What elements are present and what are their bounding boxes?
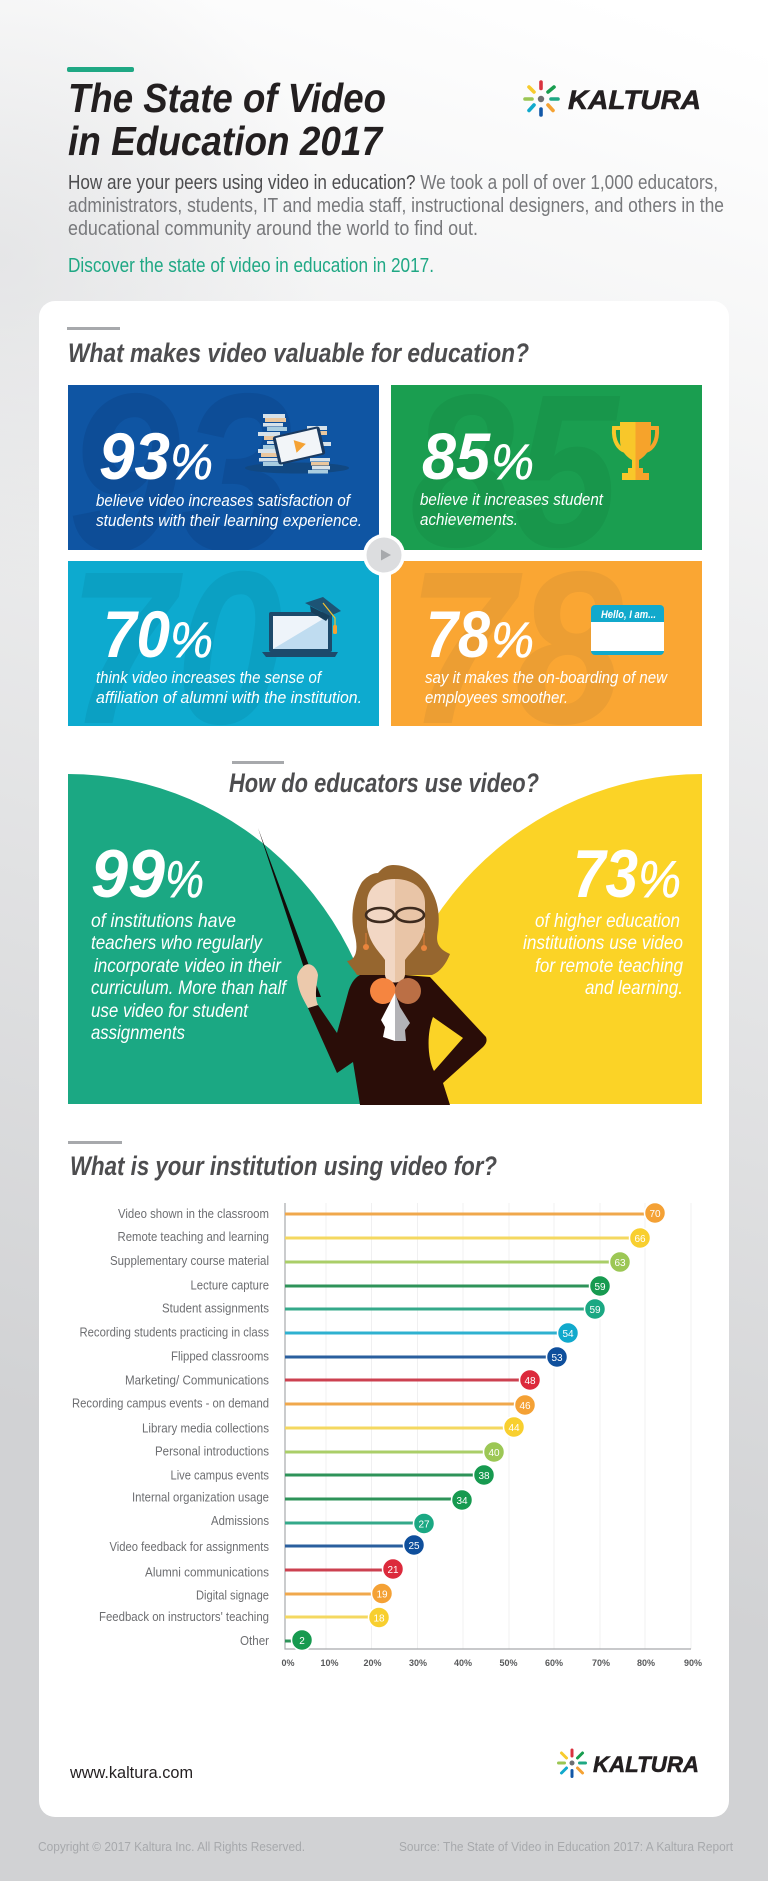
stat: 73% — [523, 836, 683, 999]
section: what makes video valuable — [67, 327, 702, 770]
green arc panel — [68, 774, 386, 1104]
stat: 73%: for remote teaching — [535, 956, 683, 977]
tablet — [272, 426, 326, 465]
row: Personal introductions — [155, 1442, 504, 1462]
row: Internal organization usage — [132, 1490, 472, 1510]
x axis labels — [281, 1658, 702, 1668]
hair — [347, 865, 450, 975]
row: Feedback on instructors' teaching — [99, 1607, 390, 1628]
row: Student assignments — [162, 1298, 606, 1320]
row: Lecture capture — [190, 1276, 610, 1296]
stat: 99% — [91, 836, 288, 1044]
row: Lecture capture: 59 — [594, 1282, 606, 1293]
panel: 93%: 93 — [68, 346, 293, 598]
description: believe video increases satisfaction of — [96, 491, 352, 510]
row: Internal organization usage: 34 — [456, 1496, 468, 1507]
bar chart — [72, 1202, 702, 1668]
intro paragraph — [68, 172, 724, 240]
row: Video shown in the classroom — [118, 1202, 666, 1224]
heading bar — [67, 327, 120, 330]
heading: How do educators use video? — [229, 768, 539, 798]
row: Other: 2 — [299, 1636, 305, 1647]
row: Library media collections: Library media collections — [142, 1420, 269, 1436]
icon: centre play button — [363, 534, 405, 576]
panel: 70%: 70 — [68, 527, 283, 770]
row: Feedback on instructors' teaching: Feedback on instructors' teaching — [99, 1609, 269, 1624]
stat: 73%: and learning. — [585, 978, 683, 999]
row: Alumni communications — [145, 1558, 404, 1580]
x axis labels: 20% — [363, 1658, 382, 1668]
stat number: 70 — [103, 597, 170, 671]
row: Flipped classrooms — [171, 1346, 568, 1368]
panel: 78%: 78 — [407, 527, 623, 770]
description: affiliation of alumni with the institution. — [96, 688, 362, 707]
description — [96, 668, 362, 707]
icon: name tag — [591, 605, 664, 655]
row: Library media collections: 44 — [508, 1423, 520, 1434]
row: Internal organization usage: Internal organization usage — [132, 1490, 269, 1504]
stat number: % — [170, 612, 213, 668]
icon: books and tablet — [245, 414, 349, 474]
pointer — [258, 828, 321, 997]
row: Supplementary course material — [110, 1252, 630, 1272]
footer logo: KALTURA — [593, 1752, 699, 1777]
row: Remote teaching and learning — [118, 1228, 650, 1248]
row: Recording students practicing in class: Recording students practicing in class — [80, 1324, 269, 1340]
row: Marketing/ Communications: 48 — [524, 1376, 536, 1387]
row: Video feedback for assignments: 25 — [408, 1541, 420, 1552]
stat: 99%: assignments — [91, 1023, 185, 1044]
row: Personal introductions: Personal introductions — [155, 1444, 269, 1458]
row: Other: Other — [240, 1633, 270, 1648]
x axis labels: 10% — [320, 1658, 339, 1668]
panel: 85%: 85 — [410, 350, 620, 593]
earrings — [363, 933, 427, 951]
intro paragraph: How are your peers using video in education? We took a poll of over 1,000 educators, — [68, 172, 718, 194]
stat number: 93 — [99, 419, 170, 493]
stat number — [99, 419, 213, 493]
stat: 73%: of higher education — [535, 911, 680, 932]
title: in Education 2017 — [68, 118, 384, 164]
heading: What makes video valuable for education? — [68, 338, 529, 368]
x axis labels: 0% — [281, 1658, 295, 1668]
row: Library media collections — [142, 1416, 524, 1438]
description — [425, 668, 669, 707]
row: Video feedback for assignments — [110, 1534, 424, 1556]
stat number: % — [491, 434, 534, 490]
row: Flipped classrooms: Flipped classrooms — [171, 1348, 269, 1364]
row: Video shown in the classroom: 70 — [649, 1209, 661, 1220]
row: Marketing/ Communications: Marketing/ Communications — [125, 1372, 269, 1388]
row: Supplementary course material: 63 — [614, 1258, 626, 1269]
x axis labels: 40% — [454, 1658, 472, 1668]
stat number: 78 — [426, 597, 490, 671]
stat number — [422, 419, 534, 493]
row: Admissions — [211, 1513, 434, 1534]
x axis labels: 80% — [637, 1658, 655, 1668]
row: Feedback on instructors' teaching: 18 — [373, 1614, 385, 1624]
stat: 99%: curriculum. More than half — [91, 978, 288, 999]
discover line: Discover the state of video in education in 2017. — [68, 255, 434, 277]
white content card — [39, 301, 729, 1817]
row: Lecture capture: Lecture capture — [190, 1278, 269, 1292]
row: Video shown in the classroom: Video shown in the classroom — [118, 1206, 269, 1221]
icon: laptop with graduation cap — [262, 597, 341, 657]
row: Marketing/ Communications — [125, 1370, 540, 1390]
collar — [370, 978, 421, 1041]
footer logo — [558, 1750, 699, 1777]
panel: 93% — [68, 385, 379, 550]
row: Remote teaching and learning: 66 — [634, 1234, 646, 1245]
logo: Kaltura — [525, 82, 701, 115]
stat: 73%: % — [638, 851, 681, 909]
row: Supplementary course material: Supplementary course material — [110, 1253, 269, 1268]
header — [67, 67, 724, 277]
row: Live campus events — [170, 1464, 494, 1486]
stat: 99%: 99 — [91, 836, 165, 912]
row: Recording students practicing in class: 54 — [562, 1329, 574, 1340]
stat number: % — [170, 434, 213, 490]
row: Video feedback for assignments: Video feedback for assignments — [110, 1539, 269, 1554]
row: Remote teaching and learning: Remote teaching and learning — [118, 1229, 269, 1244]
row: Digital signage — [196, 1583, 392, 1604]
stat: 73%: 73 — [573, 836, 638, 912]
title — [68, 75, 386, 164]
stat: 99%: incorporate video in their — [94, 956, 282, 977]
teacher illustration — [258, 828, 487, 1105]
stat: 99%: % — [165, 851, 204, 909]
description — [420, 490, 604, 529]
description: say it makes the on-boarding of new — [425, 668, 669, 687]
accent bar — [67, 67, 134, 72]
stat number — [426, 597, 534, 671]
description: achievements. — [420, 510, 518, 529]
row: Alumni communications: 21 — [387, 1565, 399, 1576]
icon: name tag: Hello, I am... — [601, 609, 656, 621]
row: Admissions: Admissions — [211, 1513, 269, 1528]
intro paragraph: educational community around the world to find out. — [68, 218, 478, 240]
row: Digital signage: Digital signage — [196, 1588, 269, 1602]
x axis labels: 50% — [499, 1658, 518, 1668]
description: students with their learning experience. — [96, 511, 362, 530]
section: chart — [68, 1141, 702, 1668]
description: think video increases the sense of — [96, 668, 323, 687]
row: Recording campus events - on demand — [72, 1394, 536, 1416]
row: Digital signage: 19 — [376, 1590, 388, 1600]
stat number: % — [491, 612, 534, 668]
x axis labels: 90% — [684, 1658, 702, 1668]
description — [96, 491, 362, 530]
stat: 73%: institutions use video — [523, 933, 683, 954]
x axis labels: 30% — [409, 1658, 427, 1668]
copyright: Copyright © 2017 Kaltura Inc. All Rights Reserved. — [38, 1839, 305, 1854]
yellow arc panel — [379, 774, 702, 1104]
icon: trophy — [614, 422, 657, 480]
row: Alumni communications: Alumni communications — [145, 1564, 269, 1580]
hand — [297, 964, 318, 1008]
description: believe it increases student — [420, 490, 604, 509]
row: Recording campus events - on demand: Recording campus events - on demand — [72, 1396, 269, 1410]
heading bar — [232, 761, 284, 764]
glasses — [366, 908, 424, 922]
row: Personal introductions: 40 — [488, 1448, 500, 1459]
logo: Kaltura: KALTURA — [568, 85, 701, 115]
heading: What is your institution using video for? — [70, 1151, 497, 1181]
x axis labels: 60% — [545, 1658, 563, 1668]
row: Admissions: 27 — [418, 1520, 430, 1530]
heading bar — [68, 1141, 122, 1144]
row: Recording students practicing in class — [80, 1322, 578, 1344]
row: Student assignments: Student assignments — [162, 1300, 269, 1316]
jacket — [308, 975, 487, 1105]
stat: 99%: teachers who regularly — [91, 933, 263, 954]
source: Source: The State of Video in Education 2017: A Kaltura Report — [399, 1839, 733, 1854]
panel: 70% — [68, 561, 379, 726]
row: Student assignments: 59 — [589, 1305, 601, 1316]
description: employees smoother. — [425, 688, 568, 707]
footer url: www.kaltura.com — [69, 1763, 193, 1782]
row: Flipped classrooms: 53 — [551, 1353, 563, 1364]
stat number — [103, 597, 213, 671]
row: Other — [240, 1630, 312, 1650]
stat: 99%: use video for student — [91, 1001, 249, 1022]
panel: 85% — [391, 385, 702, 550]
x axis labels: 70% — [592, 1658, 610, 1668]
face — [367, 879, 395, 984]
panel: 78% — [391, 561, 702, 726]
title: The State of Video — [68, 75, 386, 121]
row: Recording campus events - on demand: 46 — [519, 1401, 531, 1412]
row: Live campus events: Live campus events — [170, 1468, 269, 1482]
row: Live campus events: 38 — [478, 1471, 490, 1482]
stat number: 85 — [422, 419, 491, 493]
stat: 99%: of institutions have — [91, 911, 236, 932]
section: how do educators use video — [68, 761, 702, 1105]
